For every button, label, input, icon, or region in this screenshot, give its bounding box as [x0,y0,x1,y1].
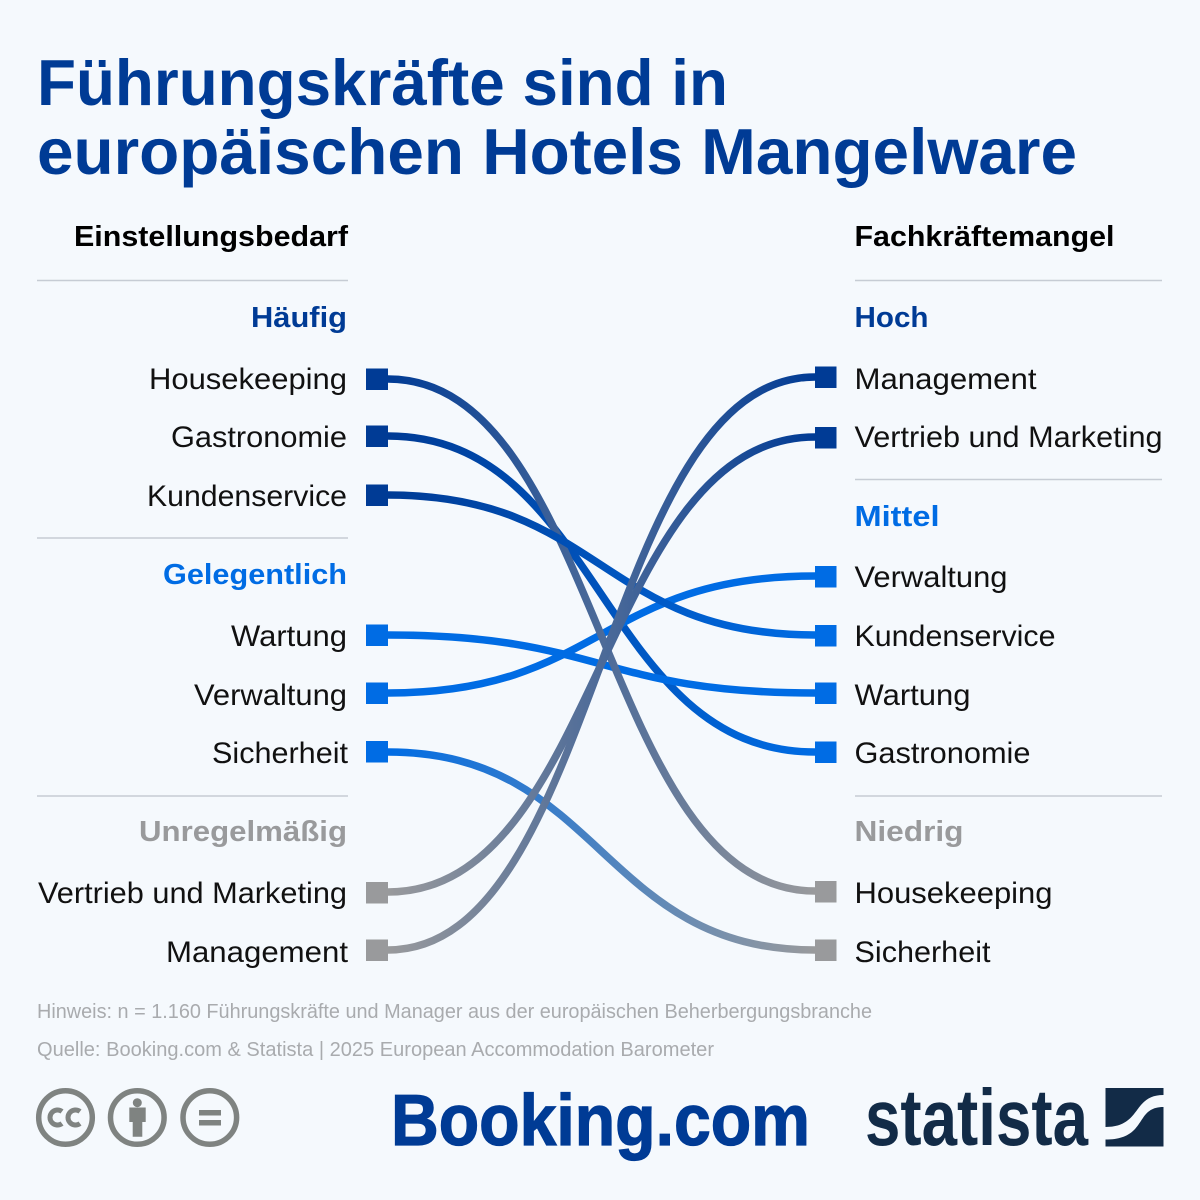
logo wordmark: statista [865,1073,1088,1162]
label: Housekeeping: Housekeeping [149,363,347,396]
icon: attribution [110,1091,164,1144]
logo: Booking.com: Booking.com [391,1081,810,1161]
label: Kundenservice: Kundenservice [147,480,347,513]
category: Niedrig: Niedrig [854,816,964,848]
curve: Housekeeping [388,379,815,891]
label: Sicherheit: Sicherheit [854,936,990,969]
right heading: Fachkräftemangel [854,221,1114,253]
label: Verwaltung: Verwaltung [194,679,347,712]
curve: Kundenservice [388,495,815,635]
curve: Vertrieb und Marketing [388,437,815,892]
left column: Einstellungsbedarf [38,221,348,969]
title: europäischen Hotels Mangelware [37,115,1077,188]
label: Vertrieb und Marketing: Vertrieb und Marketing [854,421,1162,454]
right markers [815,366,836,961]
category: Mittel: Mittel [854,501,940,533]
icon: cc [39,1091,92,1144]
category: Hoch: Hoch [854,302,928,334]
label: Gastronomie: Gastronomie [171,421,347,454]
curve: Sicherheit [388,752,815,950]
label: Sicherheit: Sicherheit [212,737,348,770]
icon: creative commons licence [39,1091,237,1144]
label: Kundenservice: Kundenservice [854,620,1056,653]
right column: Fachkräftemangel [854,221,1162,969]
label: Gastronomie: Gastronomie [854,737,1030,770]
category: Unregelmäßig: Unregelmäßig [139,816,347,848]
label: Vertrieb und Marketing: Vertrieb und Marketing [38,877,347,910]
label: Management: Management [854,363,1036,396]
curve: Verwaltung [388,576,815,693]
category: Gelegentlich: Gelegentlich [163,559,347,591]
label: Verwaltung: Verwaltung [854,561,1008,594]
label: Wartung: Wartung [854,679,970,712]
left markers [366,368,388,961]
icon: no derivatives [183,1091,237,1144]
label: Wartung: Wartung [231,620,347,653]
note: Hinweis: n = 1.160 Führungskräfte und Manager aus der europäischen Beherbergungsbranche [37,1000,872,1023]
title [37,46,1077,188]
curve: Wartung [388,635,815,693]
logo mark [1106,1088,1164,1146]
category: Häufig: Häufig [251,302,347,334]
left heading: Einstellungsbedarf [74,221,348,253]
label: Management: Management [166,936,348,969]
chart: connecting curves [388,377,815,950]
label: Housekeeping: Housekeeping [854,877,1052,910]
logo: statista [865,1073,1164,1162]
curve: Management [388,377,815,950]
curve: Gastronomie [388,436,815,752]
title: Führungskräfte sind in [37,46,728,119]
source: Quelle: Booking.com & Statista | 2025 European Accommodation Barometer [37,1038,714,1061]
